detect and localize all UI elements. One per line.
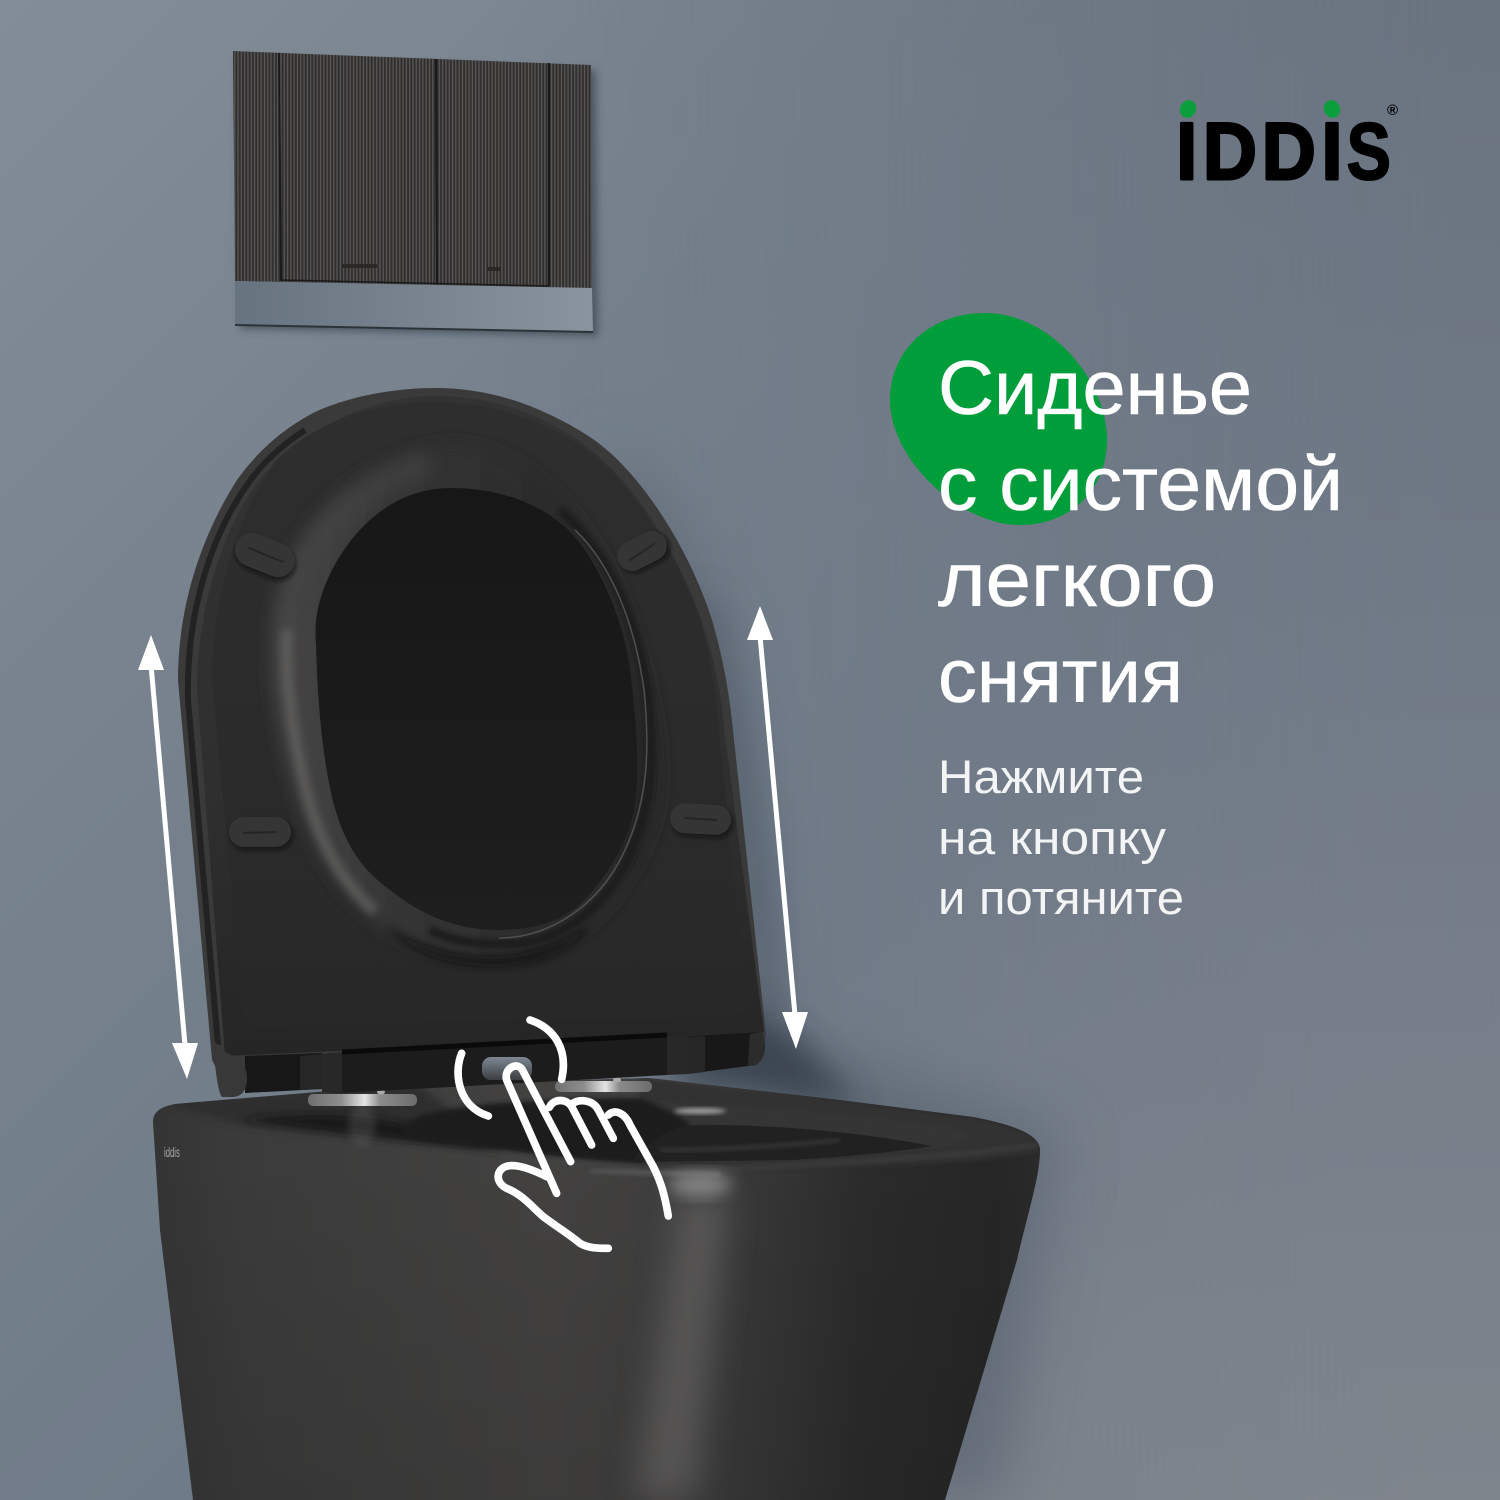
rim highlights [668, 1172, 732, 1196]
plate shadow [238, 60, 598, 336]
heading: снятия [938, 634, 1183, 719]
instruction text: на кнопку [938, 811, 1167, 864]
bumper shadows [231, 528, 734, 850]
logo dots [1177, 97, 1343, 121]
instruction text: и потяните [938, 871, 1184, 924]
ring highlight [286, 630, 375, 912]
release button [482, 1057, 532, 1080]
bowl shading and highlights [150, 1078, 1050, 1500]
bowl opening left [400, 1098, 690, 1164]
green blob [890, 313, 1107, 525]
deck shadow [240, 1115, 490, 1148]
button marks [342, 264, 500, 271]
hinge bar [342, 1035, 667, 1093]
ring finger [572, 1101, 613, 1138]
logo letters: S [1347, 106, 1391, 196]
little finger and palm edge [608, 1112, 668, 1216]
ribbed panel [233, 51, 592, 288]
instruction text: Нажмите [938, 750, 1144, 803]
icon: hand pressing button [458, 1020, 668, 1248]
metal strip [235, 281, 593, 332]
heading: с системой [938, 442, 1343, 527]
right hinge recess [686, 1032, 765, 1074]
body highlight band [635, 1195, 728, 1500]
toilet seat [178, 388, 766, 1097]
ring shading [271, 445, 661, 959]
press wave left [458, 1053, 488, 1116]
flush plate [233, 51, 598, 336]
registered mark: ® [1387, 102, 1398, 119]
toilet bowl [150, 1078, 1050, 1500]
bumper bodies [229, 526, 732, 847]
left hinge recess [245, 1053, 322, 1093]
water surface [630, 1125, 932, 1162]
inner rim wall [640, 1102, 970, 1150]
left hinge lobe [212, 1038, 247, 1097]
disc reflection [348, 1105, 376, 1145]
arrow: left double-headed [138, 635, 198, 1079]
heading: Сиденье [938, 346, 1252, 431]
heading: легкого [938, 538, 1216, 623]
seat chrome hinge posts [308, 1078, 652, 1106]
front rim line [500, 1144, 1040, 1168]
heading [938, 346, 1343, 719]
button seams [279, 53, 549, 286]
index finger [506, 1066, 571, 1193]
seat edge dark groove [188, 430, 305, 1045]
seat silhouette [178, 388, 766, 1085]
bumper slots [244, 544, 716, 833]
left arrow heads [138, 635, 198, 1079]
upper ring glow [296, 462, 430, 590]
right top rim [640, 1078, 1040, 1170]
seat plate [212, 402, 747, 1026]
opening right rim [430, 510, 651, 944]
thumb and wrist [498, 1166, 608, 1248]
logo letters: IDDI [1176, 107, 1342, 197]
left deck tone [168, 1088, 448, 1128]
hinge dividers [322, 1035, 688, 1094]
instruction text [938, 750, 1184, 924]
arrow: right double-headed [747, 606, 808, 1049]
bowl body [153, 1078, 1040, 1500]
right arrow heads [747, 606, 808, 1049]
seat opening [316, 488, 637, 930]
under-ring shadow [385, 925, 590, 966]
opening rim highlight [499, 530, 647, 938]
seat edge band [197, 396, 764, 1056]
seat and bowl wall shadow [600, 440, 1060, 1500]
bowl brand mark: iddis [164, 1146, 180, 1161]
middle finger [549, 1100, 592, 1145]
press wave right [530, 1020, 563, 1079]
logo: iddis [1176, 97, 1398, 197]
